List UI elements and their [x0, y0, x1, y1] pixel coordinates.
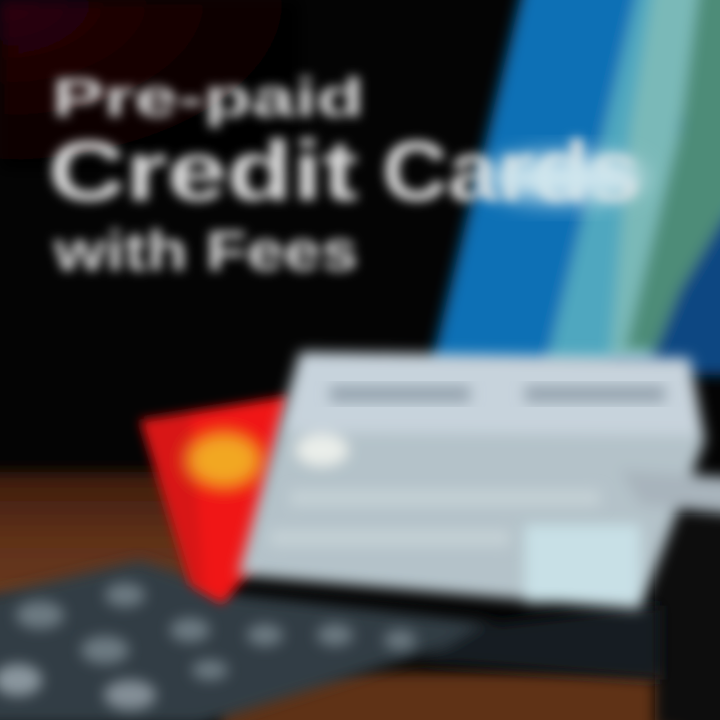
keyboard keys — [0, 583, 416, 710]
red card — [140, 396, 290, 604]
black device at bottom right — [655, 515, 720, 720]
card details — [270, 490, 600, 546]
title text — [48, 68, 640, 282]
title text: with Fees — [53, 219, 358, 282]
keyboard — [0, 560, 660, 720]
title text: Pre-paid — [52, 68, 364, 128]
faded end of title over blue panel — [485, 154, 645, 202]
white credit card — [238, 352, 720, 610]
card number strip — [330, 386, 665, 402]
title text: Cards — [382, 124, 640, 218]
background: blue and teal panel — [430, 0, 720, 375]
background: wooden table — [0, 472, 680, 720]
title text: Credit — [48, 124, 358, 218]
